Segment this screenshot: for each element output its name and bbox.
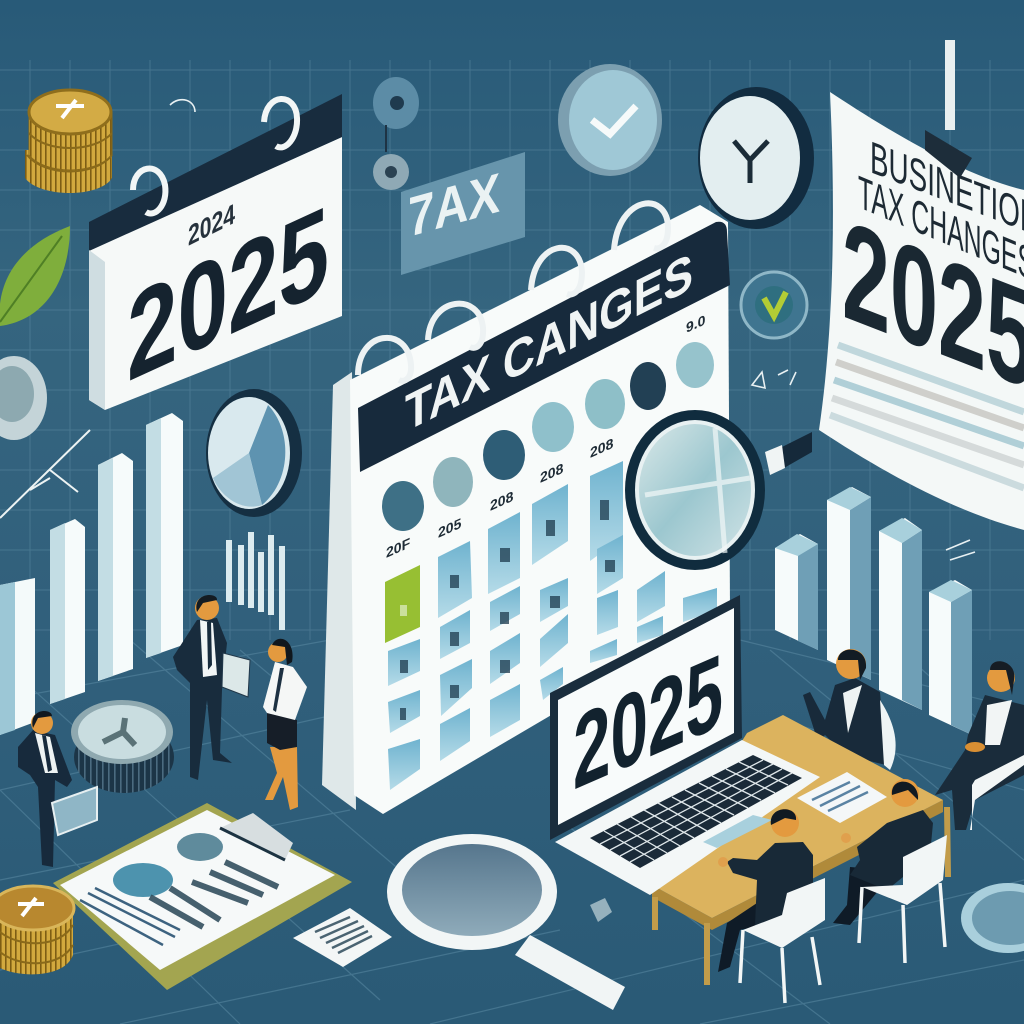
bar chart right <box>775 487 972 735</box>
calendar date labels: 9.0 <box>686 313 705 337</box>
arrow line <box>0 430 90 518</box>
lens bottom right <box>961 883 1024 953</box>
floor grid <box>0 640 1024 1024</box>
calendar cell marks <box>400 500 615 720</box>
icon: green check badge <box>741 272 807 338</box>
person: man with briefcase <box>18 711 97 867</box>
poster: business tax changes 2025 <box>819 40 1024 530</box>
small floor icon <box>590 898 612 922</box>
coin stack bottom left <box>0 886 74 974</box>
small bars <box>226 532 285 630</box>
icon: green leaf <box>0 226 70 326</box>
background grid <box>0 60 1024 640</box>
laptop keyboard <box>590 755 802 868</box>
pie chart disc <box>206 389 302 517</box>
gear dial <box>71 700 174 793</box>
calendar rings <box>133 99 297 213</box>
icon: checkmark disc <box>558 64 662 176</box>
clipboard report <box>53 803 352 990</box>
calendar date labels: 208 <box>590 436 613 462</box>
laptop <box>550 595 820 895</box>
icon: pin top <box>373 77 419 190</box>
person: man seated foreground 1 <box>718 809 825 1003</box>
calendar: small 2025 <box>89 94 342 410</box>
calendar icon row <box>382 342 714 531</box>
poster text lines <box>830 345 1024 488</box>
chair <box>859 835 947 963</box>
calendar date labels <box>386 313 705 562</box>
bar chart left <box>0 413 183 735</box>
laptop screen year: 2025 <box>573 632 723 813</box>
icon: silver disc <box>0 356 47 440</box>
chair <box>740 878 825 1003</box>
calendar date labels: 208 <box>540 461 563 487</box>
calendar date labels: 205 <box>438 516 461 542</box>
magnifying glass on calendar <box>625 410 812 570</box>
calendar year: 2025 <box>127 180 329 409</box>
icon: clock <box>698 87 814 229</box>
poster clip <box>925 40 972 178</box>
large magnifying glass <box>387 834 625 1010</box>
person: businessman standing <box>173 595 250 780</box>
tax tag: 7AX <box>408 161 500 250</box>
person: man at table top <box>803 649 896 770</box>
calendar date labels: 208 <box>490 489 513 515</box>
icon: gold coin stack top left <box>25 90 112 193</box>
calendar rings <box>358 203 668 381</box>
table <box>652 715 948 985</box>
tax tag <box>401 152 525 275</box>
note paper <box>293 908 392 967</box>
main calendar <box>322 203 730 814</box>
calendar title: TAX CANGES <box>405 241 693 443</box>
calendar cell grid <box>385 461 717 790</box>
person: woman seated right <box>935 661 1024 830</box>
person: businesswoman standing <box>263 639 307 810</box>
small doodles <box>170 100 975 560</box>
calendar date labels: 20F <box>386 536 410 562</box>
calendar faded year: 2024 <box>188 198 235 253</box>
person: man seated foreground 2 <box>833 779 947 963</box>
table paper <box>797 772 887 823</box>
